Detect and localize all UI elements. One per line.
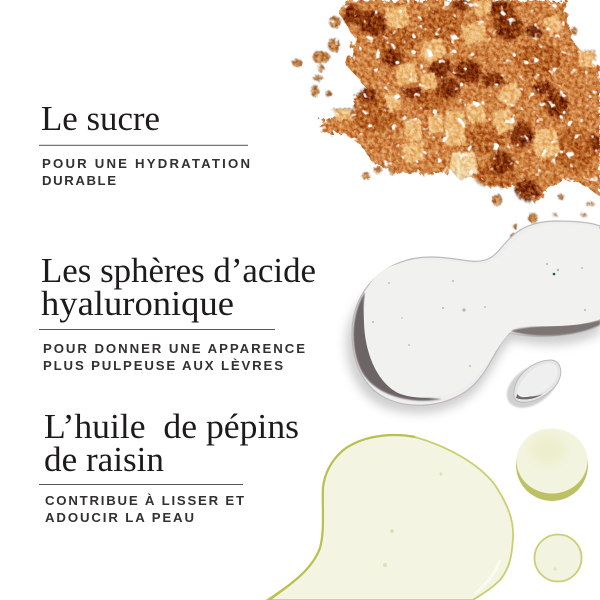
description: sugar: [42, 156, 250, 188]
droplet shadow: [346, 268, 600, 413]
droplet inner surface: [364, 224, 600, 398]
divider: [39, 484, 243, 485]
description: hyaluronic acid: POUR DONNER UNE APPARENCE: [43, 341, 305, 356]
oil highlights: [475, 560, 500, 594]
illustration: sugar crystals: [292, 0, 600, 239]
small oil drop: [534, 534, 582, 582]
description: grape seed oil: [45, 493, 244, 525]
large oil pool: [267, 435, 513, 600]
illustration: hyaluronic acid droplet: [346, 221, 600, 417]
heading: Les sphères d'acide hyaluronique: hyaluronique: [41, 284, 234, 323]
section: hyaluronic acid: [39, 251, 316, 373]
oil rim accent: [269, 435, 415, 600]
heading: Le sucre: Le sucre: [41, 99, 160, 138]
divider: [39, 145, 248, 146]
description: grape seed oil: CONTRIBUE À LISSER ET: [45, 493, 244, 508]
section: grape seed oil: [39, 407, 299, 525]
description: grape seed oil: ADOUCIR LA PEAU: [45, 510, 194, 525]
section: sugar: [39, 99, 250, 188]
medium oil drop: [516, 428, 588, 501]
heading: L'huile de pépins de raisin: de raisin: [44, 440, 164, 479]
droplet green speck: [553, 273, 555, 275]
droplet specks: [372, 263, 586, 367]
small droplet: [499, 355, 565, 417]
heading: Les sphères d'acide hyaluronique: [41, 251, 316, 323]
heading: L'huile de pépins de raisin: L’huile de pépins: [44, 407, 299, 446]
description: hyaluronic acid: PLUS PULPEUSE AUX LÈVRES: [43, 358, 283, 373]
divider: [39, 329, 275, 330]
description: sugar: POUR UNE HYDRATATION: [42, 156, 250, 171]
description: hyaluronic acid: [43, 341, 305, 373]
description: sugar: DURABLE: [42, 173, 116, 188]
heading: L'huile de pépins de raisin: [44, 407, 299, 479]
sugar loose crumbs: [292, 16, 594, 239]
heading: Les sphères d'acide hyaluronique: Les sphères d’acide: [41, 251, 316, 290]
illustration: grape seed oil droplets: [267, 428, 588, 600]
sugar pale cubes: [332, 0, 596, 180]
sugar dark patches: [343, 0, 600, 201]
droplet dark crescent: [353, 292, 442, 401]
